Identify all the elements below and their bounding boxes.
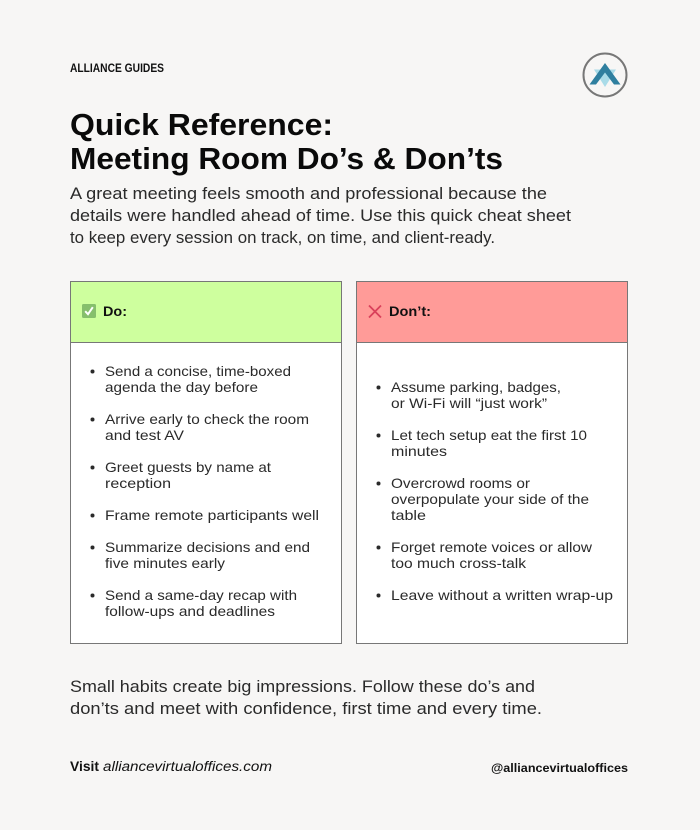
website link: alliancevirtualoffices.com [103, 759, 272, 774]
don't heading: Don’t: [389, 304, 431, 319]
don't list: Overcrowd rooms or [391, 476, 531, 491]
intro paragraph [70, 184, 571, 247]
do list: and test AV [105, 428, 184, 443]
icon: Alliance logo [584, 54, 626, 96]
closing paragraph: don’ts and meet with confidence, first time and every time. [70, 699, 542, 718]
do list: follow-ups and deadlines [105, 604, 275, 619]
don't list: Let tech setup eat the first 10 [391, 428, 587, 443]
closing paragraph: Small habits create big impressions. Follow these do’s and [70, 677, 535, 696]
don't list: Assume parking, badges, [391, 380, 561, 395]
don't list: minutes [391, 444, 447, 459]
icon: check box [82, 304, 96, 318]
don't list: Forget remote voices or allow [391, 540, 592, 555]
social handle: @alliancevirtualoffices [491, 761, 628, 775]
closing paragraph [70, 677, 542, 718]
don't list: table [391, 508, 426, 523]
don't list: or Wi-Fi will “just work” [391, 396, 548, 411]
do list [90, 364, 319, 619]
don't list: Leave without a written wrap-up [391, 588, 613, 603]
do list: reception [105, 476, 171, 491]
title: Quick Reference: [70, 107, 333, 142]
don't list: too much cross-talk [391, 556, 526, 571]
panel: don't [356, 282, 628, 644]
do list: Summarize decisions and end [105, 540, 310, 555]
don't list: overpopulate your side of the [391, 492, 589, 507]
do list: Send a same-day recap with [105, 588, 297, 603]
do heading: Do: [103, 304, 127, 319]
icon: cross [369, 306, 381, 318]
title: Meeting Room Do’s & Don’ts [70, 141, 503, 176]
don't list [376, 380, 613, 603]
title [70, 107, 503, 176]
panel: do [70, 282, 342, 644]
do list: Arrive early to check the room [105, 412, 309, 427]
website link: Visit [70, 759, 100, 774]
do header [70, 282, 342, 342]
do list: five minutes early [105, 556, 225, 571]
don't header [356, 282, 628, 342]
do list: Frame remote participants well [105, 508, 319, 523]
intro paragraph: A great meeting feels smooth and professional because the [70, 184, 547, 203]
do list: Greet guests by name at [105, 460, 271, 475]
brand label: ALLIANCE GUIDES [70, 63, 164, 75]
intro paragraph: to keep every session on track, on time, and client-ready. [70, 228, 495, 247]
do list: Send a concise, time-boxed [105, 364, 291, 379]
intro paragraph: details were handled ahead of time. Use this quick cheat sheet [70, 206, 571, 225]
do list: agenda the day before [105, 380, 258, 395]
